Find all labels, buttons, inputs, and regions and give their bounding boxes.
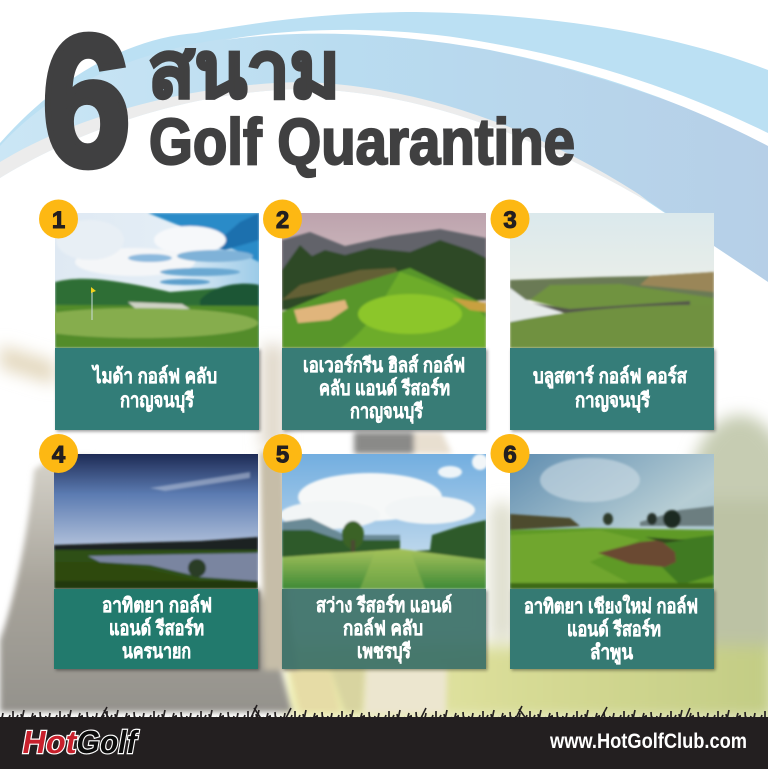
card 1: ไมด้า กอล์ฟ คลับ: [91, 364, 217, 388]
number badges: [39, 200, 530, 473]
grass silhouette: [0, 700, 768, 769]
logo word: Hot: Hot: [20, 724, 80, 760]
card 4: [54, 454, 258, 669]
photo: Sawang resort: [280, 454, 488, 589]
badge 2: [263, 200, 302, 238]
footer: [0, 700, 768, 769]
card 4: แอนด์ รีสอร์ท: [109, 617, 204, 640]
badge 1: [39, 200, 78, 238]
big number 6: 6: [42, 0, 131, 205]
title: [42, 0, 575, 205]
caption: [54, 589, 258, 669]
badge 4: [39, 434, 78, 473]
heading: Golf Quarantine: Golf Quarantine: [149, 105, 575, 178]
badge 5: [263, 434, 302, 473]
card 2: คลับ แอนด์ รีสอร์ท: [319, 377, 450, 400]
card 5: [280, 454, 488, 669]
badge 4: 4: [52, 442, 66, 468]
caption: [510, 348, 714, 430]
photo: Evergreen Hills: [282, 213, 486, 348]
card 2: [282, 213, 486, 430]
badge 3: [490, 200, 530, 238]
logo word: Golf: Golf: [74, 724, 140, 760]
card 6: แอนด์ รีสอร์ท: [567, 618, 661, 641]
card 5: เพชรบุรี: [357, 640, 411, 664]
card 1: กาญจนบุรี: [120, 389, 194, 413]
card 6: ลำพูน: [590, 642, 633, 666]
white below swoosh: [0, 89, 768, 420]
badge 6: [490, 434, 530, 473]
card 5: สว่าง รีสอร์ท แอนด์: [316, 594, 452, 617]
swoosh: blue outer arc: [0, 12, 768, 290]
caption: [55, 348, 259, 430]
photo: Blue Star: [510, 213, 714, 348]
swoosh: grey stripe: [0, 82, 650, 203]
card 1: [54, 213, 262, 434]
swoosh: inner gradient band: [0, 31, 768, 282]
swoosh: white stripe: [225, 30, 768, 146]
photo: Artitaya golf: [54, 454, 258, 589]
caption: [282, 348, 486, 430]
card 3: กาญจนบุรี: [575, 389, 650, 413]
caption: [282, 589, 486, 669]
caption: [510, 589, 714, 669]
heading: Thai: สนาม: [148, 26, 340, 114]
card 4: อาทิตยา กอล์ฟ: [102, 594, 212, 617]
card 4: นครนายก: [122, 641, 191, 663]
badge 1: 1: [52, 207, 65, 234]
badge 3: 3: [503, 207, 517, 234]
card 5: กอล์ฟ คลับ: [343, 617, 423, 640]
card 2: กาญจนบุรี: [350, 400, 423, 424]
blurred golf photo background: [0, 345, 768, 720]
card 6: อาทิตยา เชียงใหม่ กอล์ฟ: [524, 594, 698, 618]
card 2: เอเวอร์กรีน ฮิลส์ กอล์ฟ: [303, 354, 465, 377]
logo: HotGolf: [20, 724, 140, 760]
card 6: [510, 454, 714, 669]
badge 2: 2: [276, 207, 289, 234]
badge 5: 5: [276, 442, 289, 468]
photo: Mida golf: [55, 213, 259, 348]
photo: Artitaya Chiang Mai: [510, 454, 714, 589]
card 3: บลูสตาร์ กอล์ฟ คอร์ส: [533, 365, 688, 390]
badge 6: 6: [503, 442, 517, 468]
card 3: [510, 213, 714, 430]
